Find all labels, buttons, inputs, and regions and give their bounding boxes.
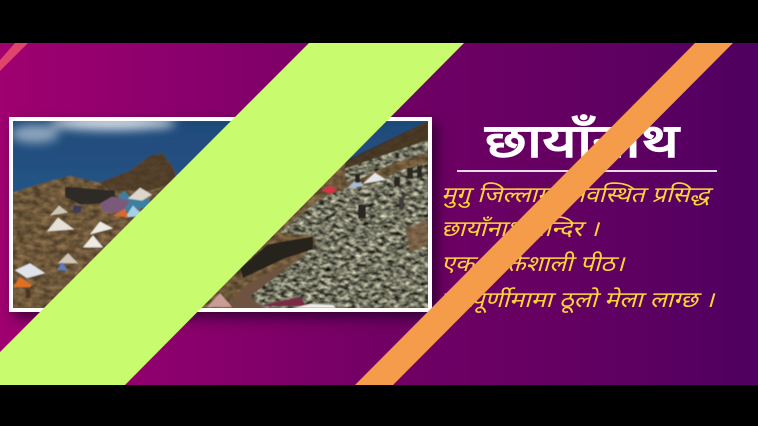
title underline [457, 170, 717, 172]
green diagonal band [0, 43, 464, 385]
rocks [250, 162, 428, 308]
orange diagonal band [355, 43, 733, 385]
line 4: जनै पूर्णीमामा ठूलो मेला लाग्छ । [441, 287, 714, 312]
stone buildings [65, 187, 115, 205]
title: छायाँनाथ [485, 114, 679, 167]
clouds [11, 116, 175, 143]
right camp tents [207, 166, 422, 308]
hillside [13, 121, 428, 308]
text block: description lines [441, 182, 716, 313]
line 1: मुगु जिल्लामा अवस्थित प्रसिद्ध [441, 182, 709, 207]
sky [13, 121, 428, 308]
line 2: छायाँनाथ मन्दिर । [441, 216, 599, 241]
line 3: एक शक्तिशाली पीठ। [441, 251, 624, 276]
left camp tents [13, 188, 152, 298]
photo: Chhayanath hillside with tents and rocks [9, 117, 432, 312]
pink corner stripe [0, 43, 28, 71]
